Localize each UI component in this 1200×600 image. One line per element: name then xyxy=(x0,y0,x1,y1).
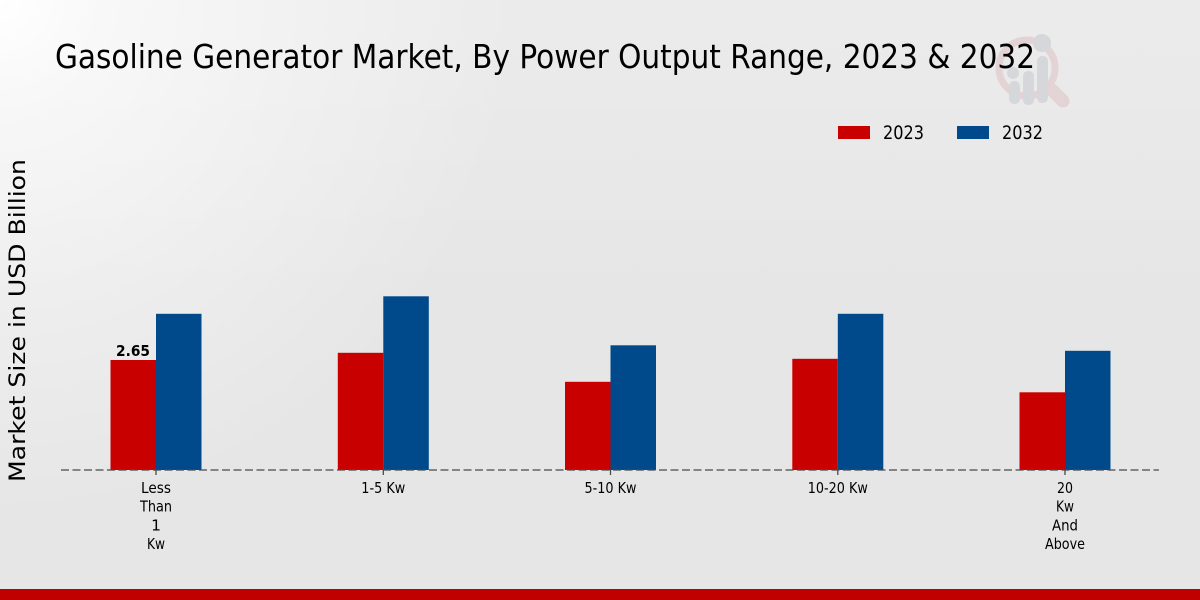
legend: 2023: 2023 xyxy=(883,123,924,144)
x axis baseline xyxy=(61,470,1159,475)
group: Less Than 1 Kw xyxy=(110,314,202,470)
legend: 2032 xyxy=(957,123,1043,144)
legend xyxy=(838,123,1043,144)
label: Less Than 1 Kw: 1 xyxy=(151,516,161,534)
label: 20 Kw And Above: Above xyxy=(1045,535,1085,553)
title: Gasoline Generator Market, By Power Output Range, 2023 & 2032 xyxy=(55,37,1035,76)
x axis category labels xyxy=(139,479,1085,553)
group: 10-20 Kw xyxy=(792,314,883,470)
legend: 2023 xyxy=(838,123,924,144)
group: 20 Kw And Above xyxy=(1020,351,1110,470)
label: Less Than 1 Kw: Than xyxy=(139,498,172,516)
icon: magnifier watermark logo xyxy=(999,34,1063,105)
footer bar xyxy=(0,589,1200,600)
label: 5-10 Kw: 5-10 Kw xyxy=(584,479,637,497)
label: Less Than 1 Kw: Less xyxy=(141,479,171,497)
group: 5-10 Kw xyxy=(565,345,656,470)
label: 20 Kw And Above: Kw xyxy=(1056,498,1074,516)
label: 1-5 Kw: 1-5 Kw xyxy=(361,479,406,497)
group: 1-5 Kw xyxy=(338,296,429,470)
y axis label: Market Size in USD Billion xyxy=(5,159,31,482)
label: Less Than 1 Kw: Kw xyxy=(147,535,165,553)
data label: 2.65: 2.65 xyxy=(116,342,150,360)
label: 20 Kw And Above: And xyxy=(1052,516,1078,534)
bar chart xyxy=(110,296,1110,470)
label: 10-20 Kw: 10-20 Kw xyxy=(808,479,868,497)
legend: 2032: 2032 xyxy=(1002,123,1043,144)
label: 20 Kw And Above: 20 xyxy=(1057,479,1073,497)
